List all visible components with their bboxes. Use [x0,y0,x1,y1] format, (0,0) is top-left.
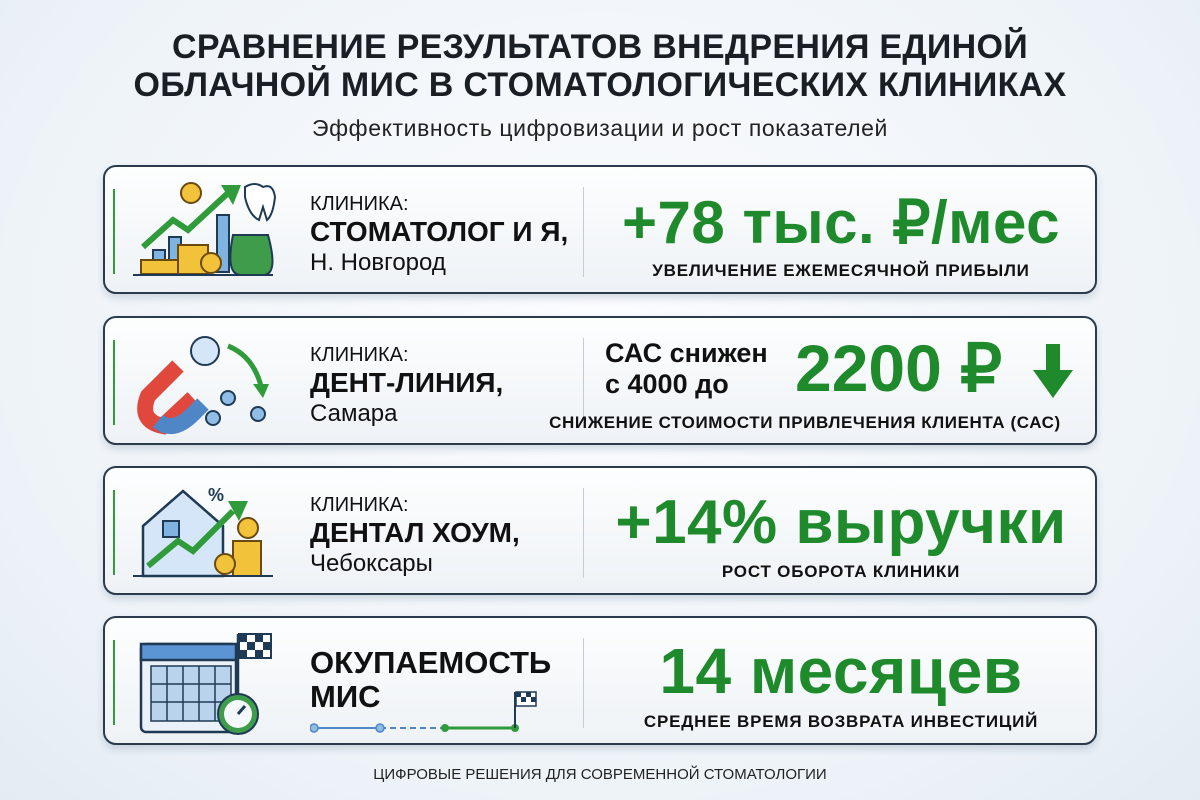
caption: СРЕДНЕЕ ВРЕМЯ ВОЗВРАТА ИНВЕСТИЦИЙ [644,712,1038,731]
footer: ЦИФРОВЫЕ РЕШЕНИЯ ДЛЯ СОВРЕМЕННОЙ СТОМАТОЛОГИИ [373,766,827,783]
text: clinic name [310,344,503,427]
subtitle: Эффективность цифровизации и рост показателей [312,115,888,141]
value: 14 месяцев [659,635,1023,707]
timeline with flag [310,691,537,733]
value: +78 тыс. ₽/мес [622,189,1060,256]
panel: card 4 [103,616,1097,745]
text: clinic name [310,494,520,577]
text: clinic name: ДЕНТ-ЛИНИЯ, [310,367,503,398]
text: clinic name: КЛИНИКА: [310,344,409,366]
text: clinic name: КЛИНИКА: [310,193,409,215]
value: CAC reduction: САС снижен [605,338,768,368]
text: clinic name: Самара [310,400,398,427]
value: CAC reduction: с 4000 до [605,369,729,399]
icon: house with growth [133,485,273,578]
panel: card 3 [103,466,1097,595]
title: СРАВНЕНИЕ РЕЗУЛЬТАТОВ ВНЕДРЕНИЯ ЕДИНОЙ [172,28,1028,66]
panel: card 1 [103,165,1097,294]
text: payback heading [310,645,551,714]
text: clinic name: Н. Новгород [310,249,446,276]
icon: house with growth: % [208,485,224,505]
title [134,27,1066,104]
panel: card 2 [103,316,1097,445]
icon: growth chart with money [133,182,276,276]
caption: РОСТ ОБОРОТА КЛИНИКИ [722,562,960,581]
text: clinic name: ДЕНТАЛ ХОУМ, [310,517,520,548]
value: CAC reduction [605,331,1073,405]
caption: СНИЖЕНИЕ СТОИМОСТИ ПРИВЛЕЧЕНИЯ КЛИЕНТА (САС) [549,413,1061,432]
value: CAC reduction: 2200 ₽ [795,331,1002,405]
text: clinic name: СТОМАТОЛОГ И Я, [310,216,568,247]
value: +14% выручки [615,488,1067,557]
text: clinic name: Чебоксары [310,550,433,577]
text: payback heading: МИС [310,679,380,714]
icon: magnet attracting clients [137,336,269,435]
text: clinic name [310,193,568,276]
text: clinic name: КЛИНИКА: [310,494,409,516]
caption: УВЕЛИЧЕНИЕ ЕЖЕМЕСЯЧНОЙ ПРИБЫЛИ [652,261,1030,280]
text: payback heading: ОКУПАЕМОСТЬ [310,645,551,680]
icon: calendar with stopwatch and flag [140,633,272,735]
title: ОБЛАЧНОЙ МИС В СТОМАТОЛОГИЧЕСКИХ КЛИНИКАХ [134,66,1066,104]
